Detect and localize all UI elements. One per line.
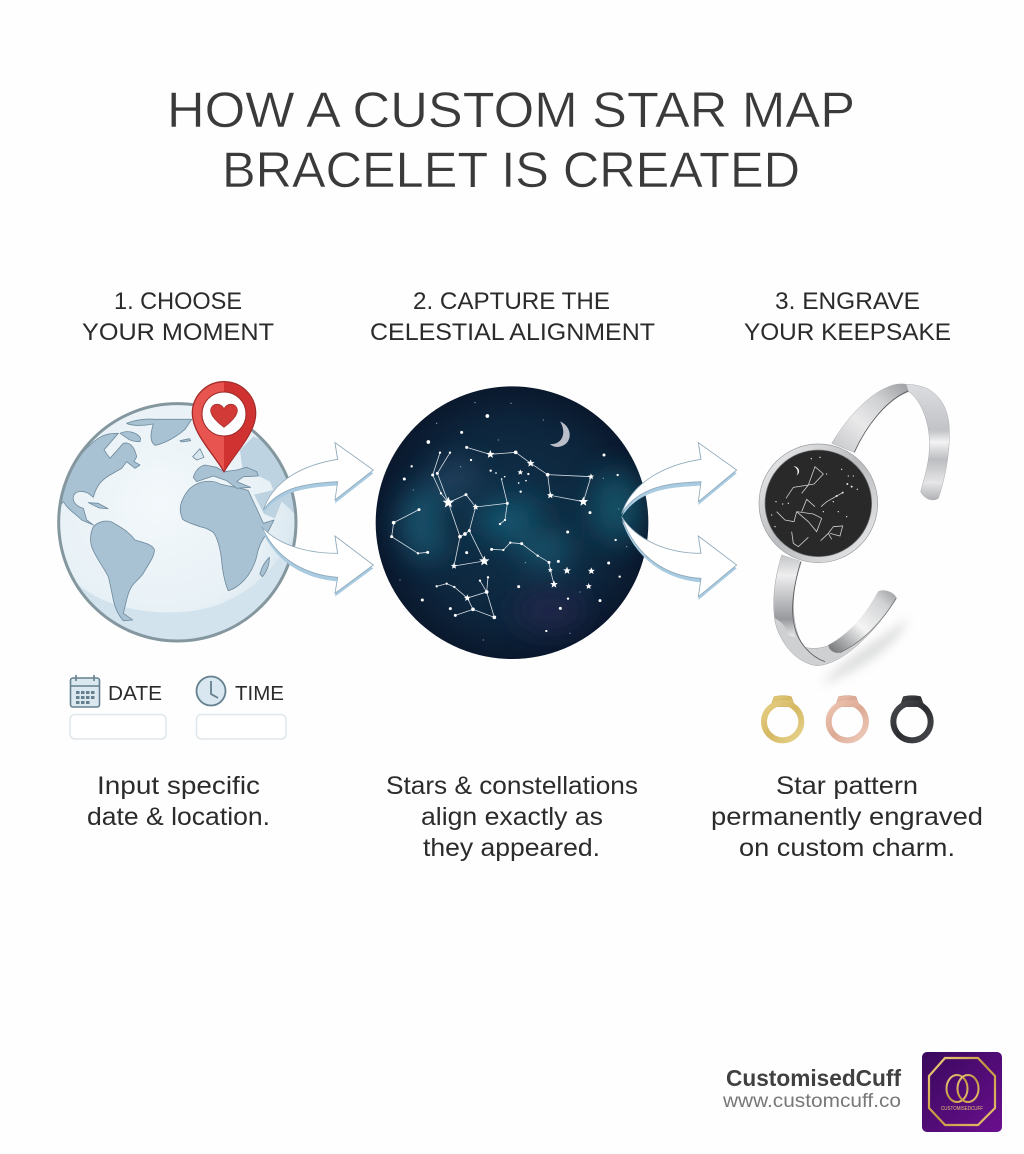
step 2 heading: CELESTIAL ALIGNMENT	[370, 319, 655, 346]
brand logo	[922, 1052, 1002, 1132]
step 1 heading: 1. CHOOSE	[114, 288, 242, 315]
engraved star pattern	[777, 467, 843, 547]
step 1 description: Input specific	[97, 772, 260, 800]
arrows from star map to bracelet	[622, 443, 737, 600]
title: BRACELET IS CREATED	[222, 142, 800, 198]
step 2 description	[386, 772, 638, 862]
lower arrow	[622, 517, 737, 600]
date input box	[70, 714, 166, 739]
globe shading crescent	[78, 558, 282, 639]
step 3 heading: YOUR KEEPSAKE	[744, 319, 951, 346]
icon: clock	[196, 676, 226, 706]
globe illustration with location pin	[57, 382, 307, 643]
icon: heart	[211, 404, 237, 427]
lower band	[774, 555, 897, 666]
upper band	[832, 384, 949, 500]
step 2 heading	[370, 288, 655, 346]
step 3 heading: 3. ENGRAVE	[775, 288, 920, 315]
brand name and url: CustomisedCuff	[726, 1065, 901, 1091]
time input box	[196, 714, 286, 739]
constellation lines	[392, 447, 591, 617]
location pin	[192, 382, 256, 472]
lower arrow	[262, 527, 373, 597]
time label: TIME	[235, 683, 284, 705]
date label: DATE	[108, 683, 162, 705]
step 2 description: they appeared.	[423, 834, 600, 862]
faint stars	[399, 402, 627, 641]
brand logo: CUSTOMISEDCUFF	[941, 1106, 983, 1112]
bracelet shadow	[822, 618, 908, 685]
metal colour options	[764, 696, 931, 740]
arrows from globe to star map	[262, 443, 373, 597]
title: HOW A CUSTOM STAR MAP	[167, 82, 855, 138]
step 1 description	[87, 772, 270, 831]
step 1 description: date & location.	[87, 803, 270, 831]
rose gold ring	[829, 696, 866, 740]
engraved moon	[793, 466, 799, 475]
step 3 description	[711, 772, 983, 862]
step 3 description: on custom charm.	[739, 834, 955, 862]
step 3 description: permanently engraved	[711, 803, 983, 831]
upper arrow	[263, 443, 373, 513]
step 3 description: Star pattern	[776, 772, 918, 800]
nebula glow	[400, 460, 643, 630]
step 1 heading: YOUR MOMENT	[82, 319, 274, 346]
stars	[390, 414, 621, 632]
silver cuff bracelet	[759, 384, 949, 685]
star map circle	[376, 386, 648, 659]
step 2 heading: 2. CAPTURE THE	[413, 288, 610, 315]
charm disc	[759, 444, 878, 563]
black ring	[893, 696, 931, 740]
crescent moon	[550, 421, 570, 447]
brand name and url: www.customcuff.co	[722, 1090, 901, 1112]
brand name and url	[722, 1065, 901, 1112]
step 3 heading	[744, 288, 951, 346]
title	[167, 82, 855, 198]
upper arrow	[622, 443, 737, 517]
continents	[57, 419, 307, 621]
step 2 description: Stars & constellations	[386, 772, 638, 800]
icon: calendar	[70, 675, 100, 707]
step 1 heading	[82, 288, 274, 346]
gold ring	[764, 696, 801, 740]
step 2 description: align exactly as	[421, 803, 603, 831]
